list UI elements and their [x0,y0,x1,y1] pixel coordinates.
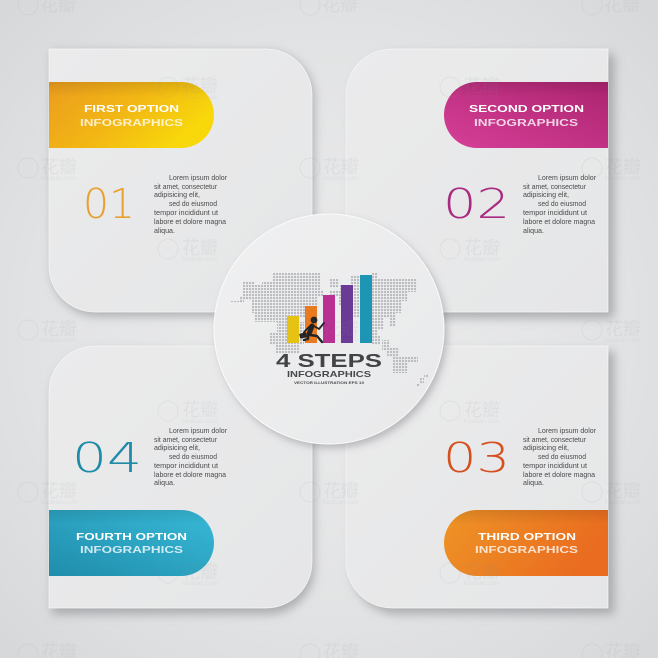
panel: first option [49,49,312,312]
watermark grid: huaban.com [41,499,77,506]
banner: second option: INFOGRAPHICS [474,117,578,129]
watermark grid: 花瓣 [182,238,218,258]
watermark grid: huaban.com [182,580,218,587]
watermark grid: huaban.com [182,418,218,425]
watermark grid: 花瓣 [464,238,500,258]
body text: adipisicing elit, [154,443,200,452]
body text: sit amet, consectetur [154,435,217,444]
banner: first option [49,82,214,148]
body text: Lorem ipsum dolor [538,173,596,182]
body text: Lorem ipsum dolor [169,173,227,182]
watermark grid: 花瓣 [182,76,218,96]
banner: first option: INFOGRAPHICS [80,117,183,129]
banner: third option: INFOGRAPHICS [475,544,578,556]
body text: sed do eiusmod [169,452,217,461]
body text: sit amet, consectetur [154,182,217,191]
subtitle: infographics: INFOGRAPHICS [287,369,371,379]
title: 4 steps: 4 STEPS [276,351,382,371]
watermark grid: huaban.com [464,256,500,263]
body text: labore et dolore magna [523,217,596,226]
banner: fourth option: FOURTH OPTION [76,531,187,543]
body text: sit amet, consectetur [523,182,586,191]
icon: running businessman [299,317,324,342]
central circle [214,214,444,444]
watermark grid: huaban.com [605,175,641,182]
body text: adipisicing elit, [154,190,200,199]
panel: fourth option [49,346,312,608]
panel: second option [346,49,608,312]
watermark grid: 花瓣 [605,319,641,339]
watermark grid: huaban.com [41,175,77,182]
card shadows [52,52,614,614]
body text: adipisicing elit, [523,443,569,452]
body text: adipisicing elit, [523,190,569,199]
body text: aliqua. [523,226,544,235]
dotted world map [230,273,428,387]
banner: second option: SECOND OPTION [469,103,584,115]
watermark grid: 花瓣 [605,481,641,501]
watermark grid: huaban.com [182,256,218,263]
banner: second option [444,82,608,148]
body text: tempor incididunt ut [154,461,218,470]
watermark grid: huaban.com [605,337,641,344]
watermark grid: 花瓣 [323,157,359,177]
watermark grid: huaban.com [323,337,359,344]
watermark grid: 花瓣 [182,562,218,582]
watermark grid: 花瓣 [182,400,218,420]
body text: aliqua. [154,226,175,235]
body text: sit amet, consectetur [523,435,586,444]
banner: fourth option [49,510,214,576]
body text [154,173,227,235]
watermark grid: 花瓣 [605,157,641,177]
body text: Lorem ipsum dolor [538,426,596,435]
body text: sed do eiusmod [538,452,586,461]
body text [154,426,227,487]
watermark grid: huaban.com [464,94,500,101]
banner: first option: FIRST OPTION [84,103,179,115]
watermark grid: huaban.com [605,499,641,506]
watermark grid: 花瓣 [323,481,359,501]
banner: third option [444,510,608,576]
body text: labore et dolore magna [154,470,227,479]
number 02: 02 [443,180,510,228]
watermark grid: 花瓣 [464,76,500,96]
body text: tempor incididunt ut [154,208,218,217]
body text: sed do eiusmod [169,199,217,208]
body text [523,426,596,487]
watermark grid: 花瓣 [41,157,77,177]
body text: tempor incididunt ut [523,208,587,217]
watermark grid: 花瓣 [464,562,500,582]
caption: VECTOR ILLUSTRATION EPS 10 [294,381,364,385]
watermark grid: huaban.com [464,580,500,587]
body text: aliqua. [154,478,175,487]
watermark grid: huaban.com [323,175,359,182]
watermark grid: huaban.com [464,418,500,425]
watermark grid: 花瓣 [41,319,77,339]
watermark grid: 花瓣 [323,319,359,339]
body text: aliqua. [523,478,544,487]
banner: third option: THIRD OPTION [478,531,576,543]
bar chart [287,275,372,343]
banner: fourth option: INFOGRAPHICS [80,544,183,556]
number 01: 01 [83,180,135,228]
body text: sed do eiusmod [538,199,586,208]
number 03: 03 [443,434,510,482]
watermark grid: huaban.com [182,94,218,101]
watermark grid: 花瓣 [464,400,500,420]
body text: tempor incididunt ut [523,461,587,470]
watermark grid: 花瓣 [41,481,77,501]
body text: labore et dolore magna [154,217,227,226]
watermark grid: huaban.com [41,337,77,344]
watermark grid: huaban.com [323,499,359,506]
panel: third option [346,346,608,608]
body text [523,173,596,235]
number 04: 04 [72,434,142,482]
body text: Lorem ipsum dolor [169,426,227,435]
body text: labore et dolore magna [523,470,596,479]
